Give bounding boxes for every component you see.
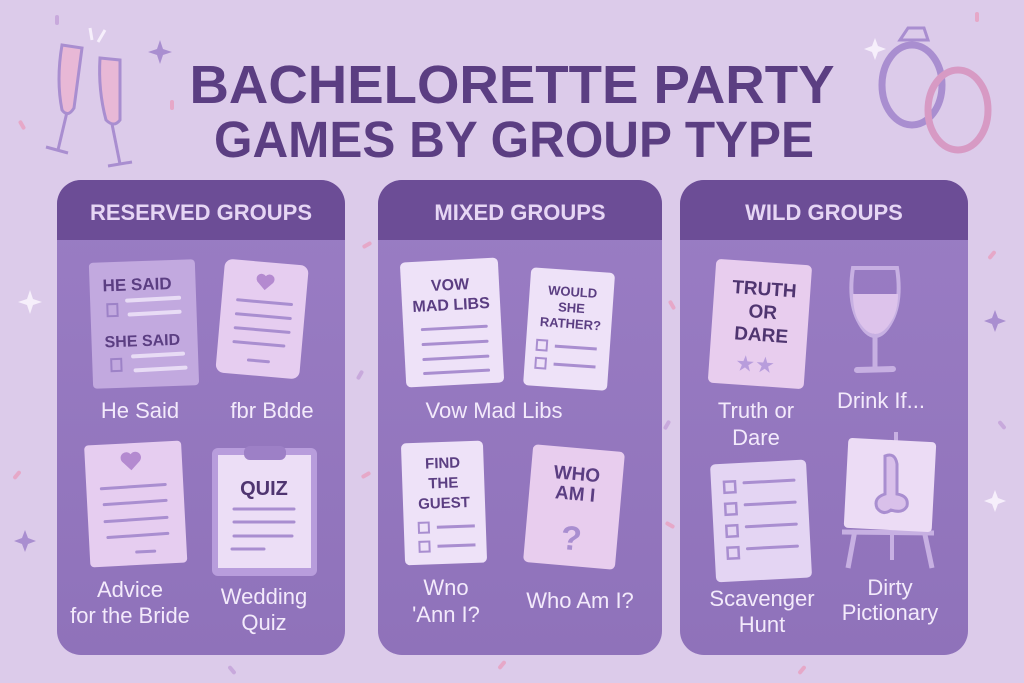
label: truth or dare: Truth or [718, 398, 794, 423]
card: find the guest: GUEST [418, 494, 470, 513]
icon: sparkles [14, 38, 1006, 552]
card: truth or dare: ★★ [735, 350, 776, 378]
label: he said: He Said [101, 398, 179, 423]
label: truth or dare: Dare [732, 425, 780, 450]
title: GAMES BY GROUP TYPE [214, 111, 814, 168]
card: who am i: WHO [553, 462, 601, 487]
card: who am i: ? [559, 519, 583, 559]
label: fbr bdde: fbr Bdde [230, 398, 314, 423]
card: would she rather: RATHER? [539, 314, 602, 333]
label: wno ann i: 'Ann I? [412, 602, 480, 627]
label: wedding quiz: Wedding [221, 584, 307, 609]
label: advice for the bride: for the Bride [70, 603, 190, 628]
label: wedding quiz: Quiz [241, 610, 287, 635]
card: would she rather: SHE [558, 299, 586, 316]
card: who am i: AM I [554, 482, 596, 507]
heading: wild: WILD GROUPS [745, 200, 903, 225]
card: find the guest [401, 441, 487, 565]
icon: champagne glasses [46, 28, 132, 166]
label: scavenger hunt: Hunt [739, 612, 785, 637]
card: heart list [215, 259, 309, 379]
card: who am i [523, 444, 625, 570]
card: vow mad libs [400, 258, 504, 387]
panel: mixed groups [378, 180, 662, 655]
label: vow mad libs: Vow Mad Libs [426, 398, 562, 423]
card: truth or dare [708, 259, 812, 389]
icon: rings [882, 28, 988, 150]
card: quiz clipboard: QUIZ [240, 478, 288, 500]
card: he said [89, 259, 199, 389]
label: drink if: Drink If... [837, 388, 925, 413]
label: advice for the bride: Advice [97, 577, 163, 602]
card: truth or dare: OR [748, 301, 778, 324]
label: dirty pictionary: Pictionary [842, 600, 938, 625]
card: vow mad libs: MAD LIBS [412, 295, 491, 316]
card: vow mad libs: VOW [431, 276, 470, 295]
label: scavenger hunt: Scavenger [709, 586, 815, 611]
card: would she rather [523, 267, 615, 391]
panel: reserved groups [57, 180, 345, 655]
icon: easel [842, 432, 936, 568]
card: quiz clipboard [212, 446, 317, 576]
label: who am i: Who Am I? [526, 588, 634, 613]
heading: mixed: MIXED GROUPS [434, 200, 606, 225]
label: wno ann i: Wno [423, 575, 469, 600]
card: find the guest: THE [428, 474, 459, 492]
card: scavenger hunt [710, 460, 812, 582]
title [190, 55, 834, 168]
title: BACHELORETTE PARTY [190, 55, 834, 115]
icon: wine glass [851, 268, 899, 370]
card: would she rather: WOULD [548, 283, 598, 301]
card: he said: SHE SAID [104, 332, 180, 351]
card: truth or dare: TRUTH [731, 277, 797, 302]
label: dirty pictionary: Dirty [867, 575, 913, 600]
panel: wild groups [680, 180, 968, 655]
heading: reserved: RESERVED GROUPS [90, 200, 312, 225]
card: truth or dare: DARE [734, 323, 789, 348]
card: find the guest: FIND [425, 454, 460, 473]
card: advice [84, 441, 187, 567]
card: he said: HE SAID [102, 274, 172, 295]
